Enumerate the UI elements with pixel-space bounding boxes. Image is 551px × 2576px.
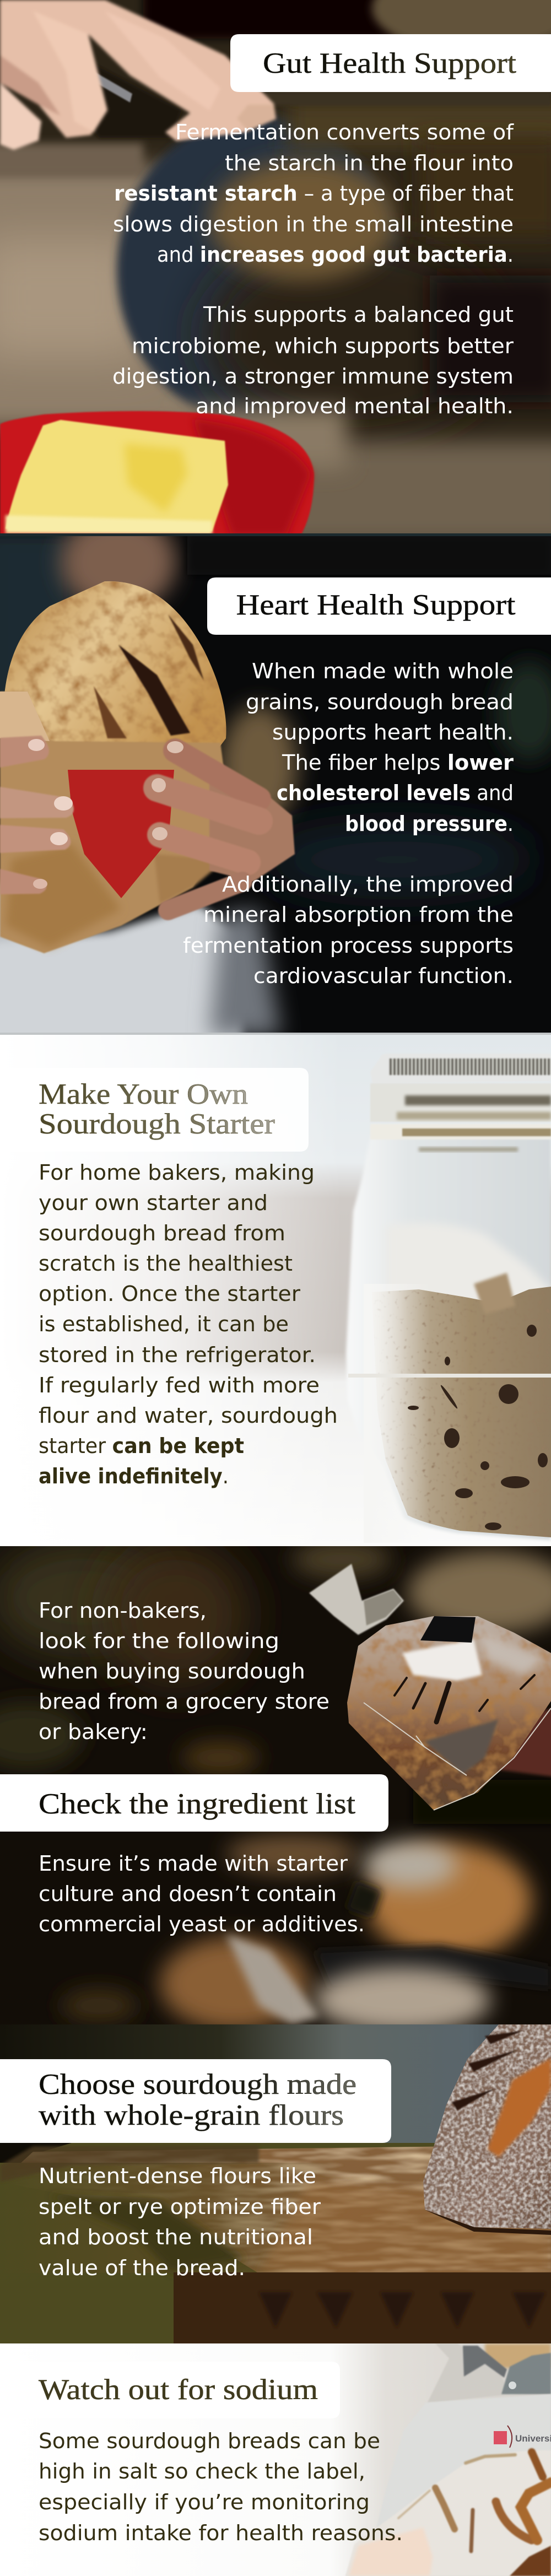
text block: mineral absorption: mineral absorption from the xyxy=(203,903,514,927)
loaf xyxy=(423,2024,551,2229)
text block: whole grains and cholesterol: cholesterol levels and xyxy=(277,781,514,805)
heading: Make Your Own xyxy=(39,1078,248,1110)
text block: balanced gut microbiome: This supports a balanced gut xyxy=(203,303,514,327)
heading box: check the ingredient list xyxy=(0,1774,388,1832)
text block: home bakers: alive indefinitely. xyxy=(39,1464,229,1488)
text block: ensure starter culture: Ensure it’s made with starter xyxy=(39,1851,348,1876)
text block: fermentation and resistant starch: and increases good gut bacteria. xyxy=(157,242,514,267)
bread loaf xyxy=(4,581,226,752)
heading: Check the ingredient list xyxy=(39,1788,355,1820)
photo: loaf on wooden board xyxy=(0,2024,551,2343)
photo: bagged sourdough loaf and blurred breads xyxy=(0,1537,551,2033)
icon: university logo xyxy=(494,2426,551,2448)
text block: non-bakers intro: For non-bakers, xyxy=(39,1598,207,1623)
text block: fermentation and resistant starch xyxy=(113,120,515,267)
text block: non-bakers intro: bread from a grocery store xyxy=(39,1689,329,1714)
heading: Watch out for sodium xyxy=(39,2374,318,2406)
text block: nutrient-dense flours: and boost the nutritional xyxy=(39,2225,313,2249)
text block: ensure starter culture: commercial yeast or additives. xyxy=(39,1912,365,1936)
heading xyxy=(39,1078,275,1140)
text block: nutrient-dense flours: spelt or rye optimize fiber xyxy=(39,2195,321,2219)
text block: ensure starter culture xyxy=(39,1851,365,1936)
text block: non-bakers intro: look for the following xyxy=(39,1629,279,1653)
text block: mineral absorption: Additionally, the improved xyxy=(222,872,514,897)
text block: home bakers: starter can be kept xyxy=(39,1434,244,1458)
text block: sodium advice: especially if you’re monitoring xyxy=(39,2490,370,2514)
photo: person holding loaf in paper bag xyxy=(0,512,551,1047)
text block: whole grains and cholesterol xyxy=(246,659,514,836)
heading box: make your own sourdough starter xyxy=(0,1068,309,1152)
text block: sodium advice: Some sourdough breads can be xyxy=(39,2429,380,2453)
text block: whole grains and cholesterol: blood pressure. xyxy=(345,812,514,836)
text block: fermentation and resistant starch: Fermentation converts some of xyxy=(175,120,515,144)
text block: home bakers: flour and water, sourdough xyxy=(39,1403,338,1428)
right hand xyxy=(0,736,295,910)
heading box: heart health support xyxy=(207,577,551,635)
text block: whole grains and cholesterol: grains, sourdough bread xyxy=(246,690,514,714)
text block: non-bakers intro xyxy=(39,1598,329,1744)
text block: whole grains and cholesterol: The fiber helps lower xyxy=(282,750,514,775)
apron xyxy=(345,2394,551,2576)
bread held by baker xyxy=(345,2450,551,2576)
text block: home bakers: stored in the refrigerator. xyxy=(39,1343,316,1367)
text block: whole grains and cholesterol: supports heart health. xyxy=(272,720,514,744)
text block: nutrient-dense flours: value of the bread. xyxy=(39,2256,245,2280)
text block: mineral absorption: cardiovascular function. xyxy=(253,964,514,988)
text block: sodium advice: high in salt so check the label, xyxy=(39,2459,365,2483)
heading: Sourdough Starter xyxy=(39,1108,275,1140)
text block: home bakers: If regularly fed with more xyxy=(39,1373,320,1397)
text block: sodium advice xyxy=(39,2429,403,2545)
panel: make your own sourdough starter xyxy=(0,1035,551,1546)
heading: with whole-grain flours xyxy=(39,2099,344,2131)
text block: home bakers: your own starter and xyxy=(39,1191,268,1215)
text block: home bakers: scratch is the healthiest xyxy=(39,1251,293,1276)
panel: choose whole-grain flours xyxy=(0,2024,551,2343)
text block: sodium advice: sodium intake for health reasons. xyxy=(39,2521,403,2545)
panel: non-bakers and ingredient list xyxy=(0,1537,551,2033)
text block: fermentation and resistant starch: slows digestion in the small intestine xyxy=(113,212,514,236)
text block: balanced gut microbiome: digestion, a stronger immune system xyxy=(112,364,514,388)
heading: Heart Health Support xyxy=(236,589,516,621)
text block: non-bakers intro: when buying sourdough xyxy=(39,1659,305,1683)
panel: heart health support xyxy=(0,512,551,1047)
photo: starter in glass jar xyxy=(0,1035,551,1546)
heading box: gut health support xyxy=(230,34,551,92)
heading box: choose sourdough made with whole-grain flours xyxy=(0,2059,391,2143)
text block: whole grains and cholesterol: When made with whole xyxy=(252,659,514,683)
text block: nutrient-dense flours xyxy=(39,2164,321,2280)
panel: gut health support xyxy=(0,0,551,546)
hand fingers xyxy=(0,0,276,150)
text block: home bakers: For home bakers, making xyxy=(39,1160,315,1185)
text block: mineral absorption: fermentation process supports xyxy=(183,933,514,958)
text block: home bakers: option. Once the starter xyxy=(39,1282,300,1306)
heading: Gut Health Support xyxy=(263,47,516,79)
starter air pockets xyxy=(408,1325,548,1530)
text block: home bakers: is established, it can be xyxy=(39,1312,289,1336)
text block: balanced gut microbiome: and improved mental health. xyxy=(196,394,514,418)
photo: hand slicing bread with butter dish xyxy=(0,0,551,546)
text block: home bakers xyxy=(39,1160,338,1488)
text block: nutrient-dense flours: Nutrient-dense flours like xyxy=(39,2164,316,2188)
photo: baker in apron holding loaf xyxy=(0,2343,551,2576)
heading box: watch out for sodium xyxy=(0,2362,340,2418)
text block: ensure starter culture: culture and doesn’t contain xyxy=(39,1882,337,1906)
text block: fermentation and resistant starch: the starch in the flour into xyxy=(225,151,514,175)
heading xyxy=(39,2069,356,2131)
text block: home bakers: sourdough bread from xyxy=(39,1221,285,1245)
text block: non-bakers intro: or bakery: xyxy=(39,1720,148,1744)
panel: watch out for sodium xyxy=(0,2343,551,2576)
text block: mineral absorption xyxy=(183,872,514,988)
heading: Choose sourdough made xyxy=(39,2069,356,2100)
text block: fermentation and resistant starch: resistant starch – a type of fiber that xyxy=(114,181,514,206)
text block: balanced gut microbiome xyxy=(112,303,514,418)
text block: balanced gut microbiome: microbiome, which supports better xyxy=(132,334,514,358)
bagged loaf xyxy=(347,1616,551,1810)
plastic bag tie xyxy=(309,1564,404,1635)
